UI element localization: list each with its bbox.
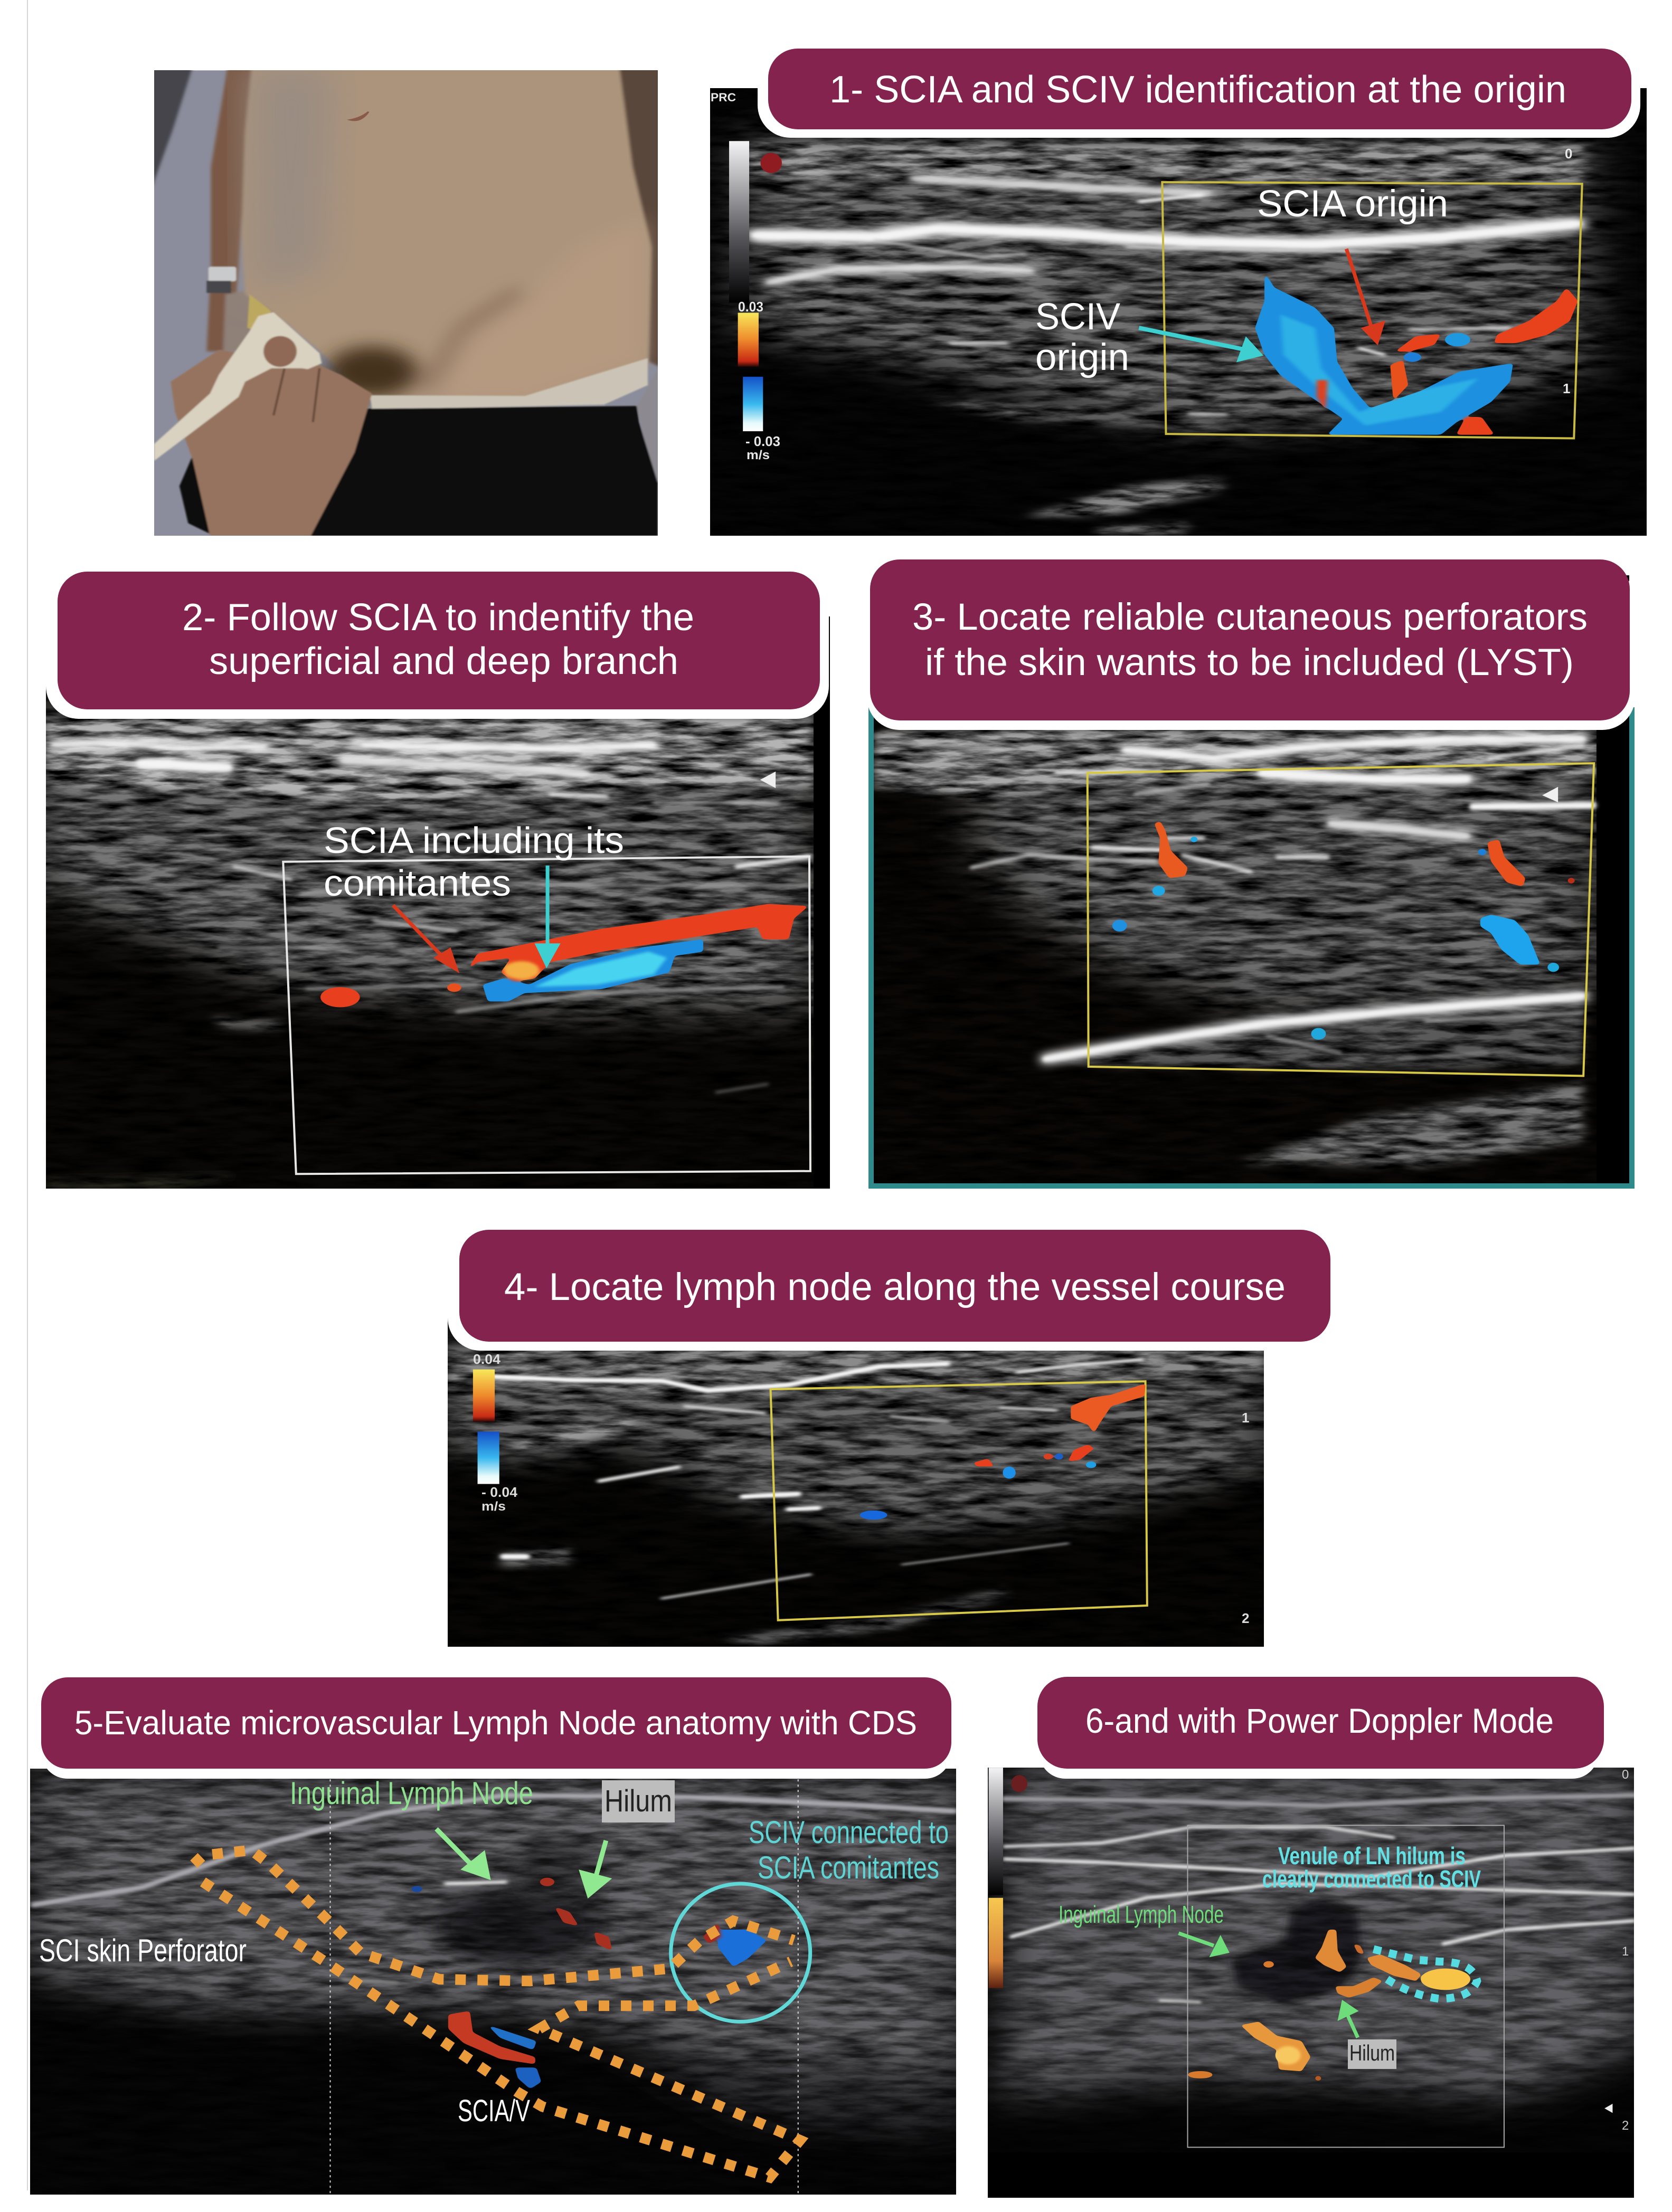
- arrow: SCIA cyan: [535, 866, 561, 968]
- scale labels: 1: [1242, 1410, 1249, 1426]
- power doppler flow: [1188, 1930, 1470, 2081]
- heading 3: if the skin wants to be included (LYST): [925, 642, 1574, 683]
- label: SCIA including its comitantes: comitantes: [324, 862, 511, 904]
- heading 2: [46, 572, 829, 719]
- label: SCIV origin: SCIV: [1035, 296, 1121, 338]
- scale labels: m/s: [747, 448, 770, 462]
- label: SCI skin Perforator: SCI skin Perforator: [39, 1933, 247, 1968]
- label: SCIV origin: [1035, 296, 1129, 378]
- colour doppler flow: SCIA and comitantes: [320, 904, 808, 1007]
- label: SCIA/V: SCIA/V: [458, 2094, 530, 2128]
- label: SCIV connected to SCIA comitantes: SCIV connected to: [749, 1815, 949, 1850]
- label: Venule of LN hilum: Venule of LN hilum is: [1278, 1842, 1466, 1869]
- green arrow: hilum: [1337, 2000, 1359, 2038]
- heading 6: 6-and with Power Doppler Mode: [1085, 1701, 1554, 1740]
- label: Hilum: Hilum: [604, 1784, 672, 1818]
- label: Inguinal Lymph Node: Inguinal Lymph Node: [290, 1776, 533, 1811]
- panel 3: cutaneous perforators: [868, 575, 1635, 1189]
- label: Hilum: Hilum: [1349, 2040, 1395, 2065]
- colour doppler flow: SCIV and SCIA: [1255, 272, 1577, 434]
- heading 1: [758, 49, 1640, 138]
- label: SCIA including its comitantes: [324, 820, 624, 904]
- dotted outline: SCIA/V course: [194, 1850, 800, 2177]
- arrow: SCIA origin: [1346, 249, 1385, 345]
- scale labels: PRC: [711, 91, 736, 104]
- scale labels: [473, 1351, 1249, 1626]
- label: SCIV connected to SCIA comitantes: SCIA comitantes: [758, 1850, 939, 1885]
- green arrow: lymph node: [436, 1829, 491, 1880]
- ultrasound image 2: [32, 616, 830, 1189]
- scale labels: 2: [1242, 1610, 1249, 1626]
- colour doppler flow: [411, 1878, 767, 2089]
- heading 3: [867, 559, 1635, 730]
- label: SCIA including its comitantes: SCIA including its: [324, 820, 624, 861]
- ultrasound image 5: [21, 1769, 967, 2195]
- heading 4: [448, 1230, 1330, 1351]
- heading 1: 1- SCIA and SCIV identification at the origin: [829, 69, 1566, 111]
- scale labels: - 0.04: [481, 1484, 518, 1500]
- scale labels: 0: [1565, 146, 1572, 162]
- scale labels: 1: [1563, 381, 1570, 396]
- scale labels: [711, 91, 1572, 462]
- heading 6: [1037, 1677, 1604, 1779]
- circle: SCIV connection: [671, 1884, 810, 2021]
- label: Venule of LN hilum: clearly connected to SCIV: [1262, 1865, 1481, 1893]
- ultrasound image 3: [874, 575, 1629, 1183]
- heading 2: superficial and deep branch: [209, 640, 678, 682]
- heading 2: 2- Follow SCIA to indentify the: [182, 596, 694, 639]
- panel 6: power doppler mode: [988, 1767, 1641, 2199]
- label: SCIV origin: origin: [1035, 337, 1129, 378]
- label: Venule of LN hilum: [1262, 1842, 1481, 1893]
- ultrasound image 6: [988, 1767, 1641, 2199]
- label: Inguinal Lymph Node: Inguinal Lymph Node: [1059, 1901, 1224, 1928]
- heading 3: 3- Locate reliable cutaneous perforators: [912, 596, 1588, 638]
- dotted outline: SCIV: [1374, 1949, 1477, 1999]
- panel 1: SCIA and SCIV origin: [710, 88, 1647, 536]
- panel 2: SCIA branches: [32, 616, 830, 1189]
- arrow: comitantes red: [393, 905, 459, 973]
- colour doppler flow: perforators: [1112, 821, 1575, 1040]
- scale labels: 0.03: [738, 299, 763, 315]
- scale labels: 0.04: [473, 1351, 501, 1367]
- photo: probe placed on patient's groin: [151, 67, 663, 536]
- ultrasound image 6: 2: [1622, 2119, 1629, 2133]
- green arrow: lymph node: [1178, 1933, 1230, 1957]
- arrow: SCIV origin: [1139, 328, 1263, 362]
- label: SCIV connected to SCIA comitantes: [749, 1815, 949, 1885]
- label: Hilum: [1348, 2039, 1396, 2069]
- panel 4: lymph node along vessel course: [433, 1285, 1264, 1647]
- label: SCIA origin: SCIA origin: [1257, 183, 1448, 225]
- heading 4: 4- Locate lymph node along the vessel course: [504, 1266, 1286, 1308]
- panel 5: colour doppler lymph node anatomy: [21, 1769, 967, 2195]
- scale labels: m/s: [481, 1499, 506, 1514]
- heading 5: 5-Evaluate microvascular Lymph Node anatomy with CDS: [74, 1704, 917, 1742]
- ultrasound image 6: 1: [1622, 1944, 1629, 1959]
- ultrasound image 4: [433, 1285, 1264, 1647]
- green arrow: hilum: [579, 1840, 612, 1898]
- heading 5: [41, 1677, 951, 1779]
- scale labels: - 0.03: [745, 433, 780, 449]
- ultrasound image 1: [710, 88, 1647, 536]
- ultrasound image 6: 0: [1622, 1768, 1629, 1782]
- colour doppler flow: node vessels: [860, 1383, 1146, 1520]
